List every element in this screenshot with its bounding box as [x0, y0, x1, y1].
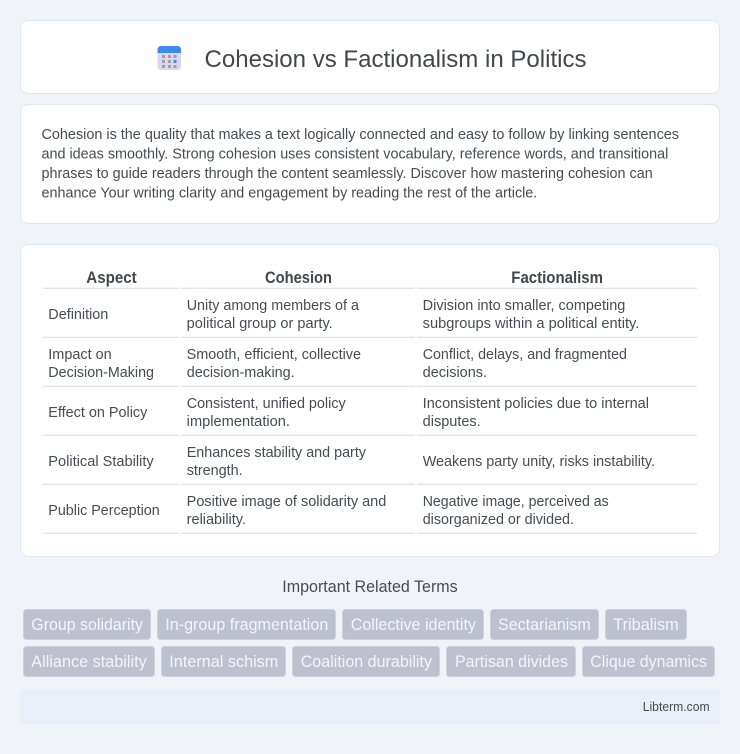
tag: Internal schism: [162, 646, 286, 676]
table row: Definition: Unity among members of a: [187, 298, 359, 314]
tag: Collective identity: [342, 610, 484, 640]
footer text: site name: Libterm.com: [643, 699, 710, 714]
table row: Political Stability: Weakens party unity, risks instability.: [423, 454, 655, 470]
tag: Coalition durability: [292, 646, 440, 676]
table row: Political Stability: Enhances stability and party: [187, 445, 367, 461]
table row: Public Perception: Negative image, perceived as: [423, 494, 609, 510]
panel: header: [20, 20, 720, 94]
tag: Alliance stability: Alliance stability: [31, 653, 147, 671]
table row: Effect on Policy: implementation.: [187, 414, 290, 430]
table row: Effect on Policy: disputes.: [423, 414, 481, 430]
table row: Definition: political group or party.: [187, 316, 333, 332]
icon: calendar: [158, 46, 181, 70]
tag: Coalition durability: Coalition durability: [301, 653, 433, 671]
table row: Effect on Policy: [43, 396, 697, 436]
tag: In-group fragmentation: [158, 610, 336, 640]
table row: Public Perception: [43, 494, 697, 534]
text block: introduction paragraph: [42, 127, 679, 202]
heading: related terms: Important Related Terms: [282, 578, 458, 596]
title: Cohesion vs Factionalism in Politics: [204, 46, 586, 73]
table row: Impact on Decision-Making: [43, 347, 697, 387]
tag: In-group fragmentation: In-group fragmentation: [165, 616, 328, 634]
table row: Public Perception: reliability.: [187, 512, 246, 528]
table header row: Cohesion: [265, 269, 332, 287]
text block: introduction paragraph: phrases to guide readers through the content seamlessly. Discover how mastering cohesion can: [42, 166, 653, 182]
table row: Public Perception: Positive image of solidarity and: [187, 494, 386, 510]
table row: Effect on Policy: Effect on Policy: [48, 405, 148, 421]
text block: introduction paragraph: and ideas smoothly. Strong cohesion uses consistent vocabulary, reference words, and transitional: [42, 146, 668, 162]
table row: Definition: Definition: [48, 307, 108, 323]
table row: Impact on Decision-Making: decision-making.: [187, 365, 295, 381]
table row: Political Stability: Political Stability: [48, 454, 155, 470]
tag: Tribalism: Tribalism: [613, 616, 679, 634]
table row: Definition: Division into smaller, competing: [423, 298, 625, 314]
tag: Tribalism: [606, 610, 686, 640]
tag: Alliance stability: [24, 646, 154, 676]
tag: Clique dynamics: [582, 646, 714, 676]
table row: Impact on Decision-Making: Impact on: [48, 347, 112, 363]
table row: Effect on Policy: Inconsistent policies due to internal: [423, 396, 649, 412]
tag: Internal schism: Internal schism: [169, 653, 278, 671]
table row: Impact on Decision-Making: decisions.: [423, 365, 487, 381]
tag: Clique dynamics: Clique dynamics: [590, 653, 707, 671]
text block: introduction paragraph: enhance Your writing clarity and engagement by reading the rest of the article.: [42, 186, 537, 202]
tag: Partisan divides: Partisan divides: [455, 653, 568, 671]
table row: Definition: subgroups within a political entity.: [423, 316, 639, 332]
table row: Impact on Decision-Making: Smooth, efficient, collective: [187, 347, 361, 363]
table row: Effect on Policy: Consistent, unified policy: [187, 396, 346, 412]
tag: Group solidarity: [24, 610, 150, 640]
tag: Group solidarity: Group solidarity: [31, 616, 144, 634]
table header row: Aspect: [86, 269, 137, 287]
table header row: Factionalism: [511, 269, 603, 287]
table row: Impact on Decision-Making: Decision-Making: [48, 365, 154, 381]
table row: Public Perception: disorganized or divided.: [423, 512, 574, 528]
panel: comparison table: [20, 244, 720, 556]
table header row: [43, 269, 697, 289]
table row: Political Stability: strength.: [187, 463, 243, 479]
footer bar: [20, 690, 720, 724]
tag: Partisan divides: [446, 646, 576, 676]
tag: Sectarianism: [490, 610, 598, 640]
table row: Political Stability: [43, 445, 697, 485]
tag: Sectarianism: Sectarianism: [498, 616, 591, 634]
table row: Public Perception: Public Perception: [48, 503, 160, 519]
table row: Impact on Decision-Making: Conflict, delays, and fragmented: [423, 347, 627, 363]
text block: introduction paragraph: Cohesion is the quality that makes a text logically connected and easy to follow by linking sentences: [42, 127, 679, 143]
tag: Collective identity: Collective identity: [351, 616, 477, 634]
panel: introduction: [20, 104, 720, 224]
table row: Definition: [43, 298, 697, 338]
tag group: related terms: [24, 610, 714, 676]
